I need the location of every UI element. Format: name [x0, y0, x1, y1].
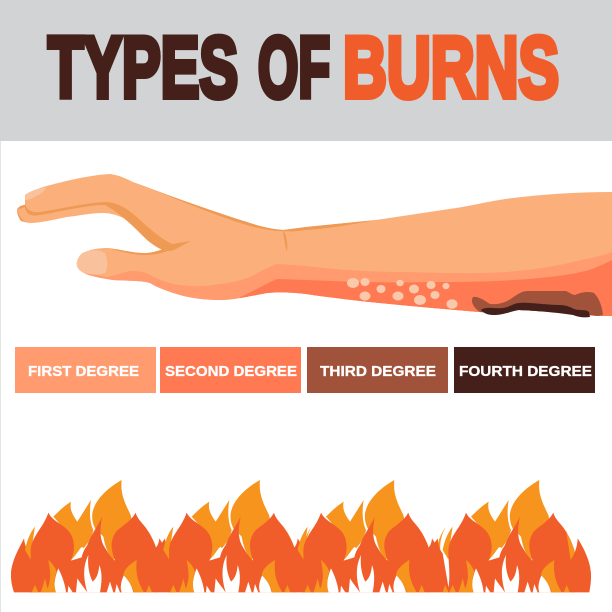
- skin regions of the arm: [17, 174, 612, 316]
- header band: [0, 0, 612, 141]
- title: of: OF: [258, 20, 330, 116]
- fourth degree burn: [481, 303, 590, 317]
- thumbnail: [77, 250, 107, 275]
- legend: fourth degree: FOURTH DEGREE: [459, 363, 592, 380]
- legend: second degree: [160, 347, 301, 393]
- flames: [11, 480, 591, 592]
- title: [48, 20, 559, 116]
- legend: first degree: [15, 347, 156, 393]
- legend: first degree: FIRST DEGREE: [28, 363, 139, 380]
- blisters: [347, 278, 458, 309]
- legend: third degree: [307, 347, 448, 393]
- third degree burn: [472, 291, 603, 316]
- legend: fourth degree: [454, 347, 595, 393]
- legend: third degree: THIRD DEGREE: [320, 363, 436, 380]
- skin creases: [17, 182, 376, 255]
- title: types: TYPES: [48, 20, 238, 116]
- right end flame: [566, 530, 576, 560]
- left end flame: [11, 538, 37, 592]
- background edge lines: [0, 141, 1, 612]
- arm illustration: [17, 174, 612, 318]
- legend: second degree: SECOND DEGREE: [165, 363, 297, 380]
- fingernail: [25, 187, 46, 200]
- legend: [15, 347, 595, 393]
